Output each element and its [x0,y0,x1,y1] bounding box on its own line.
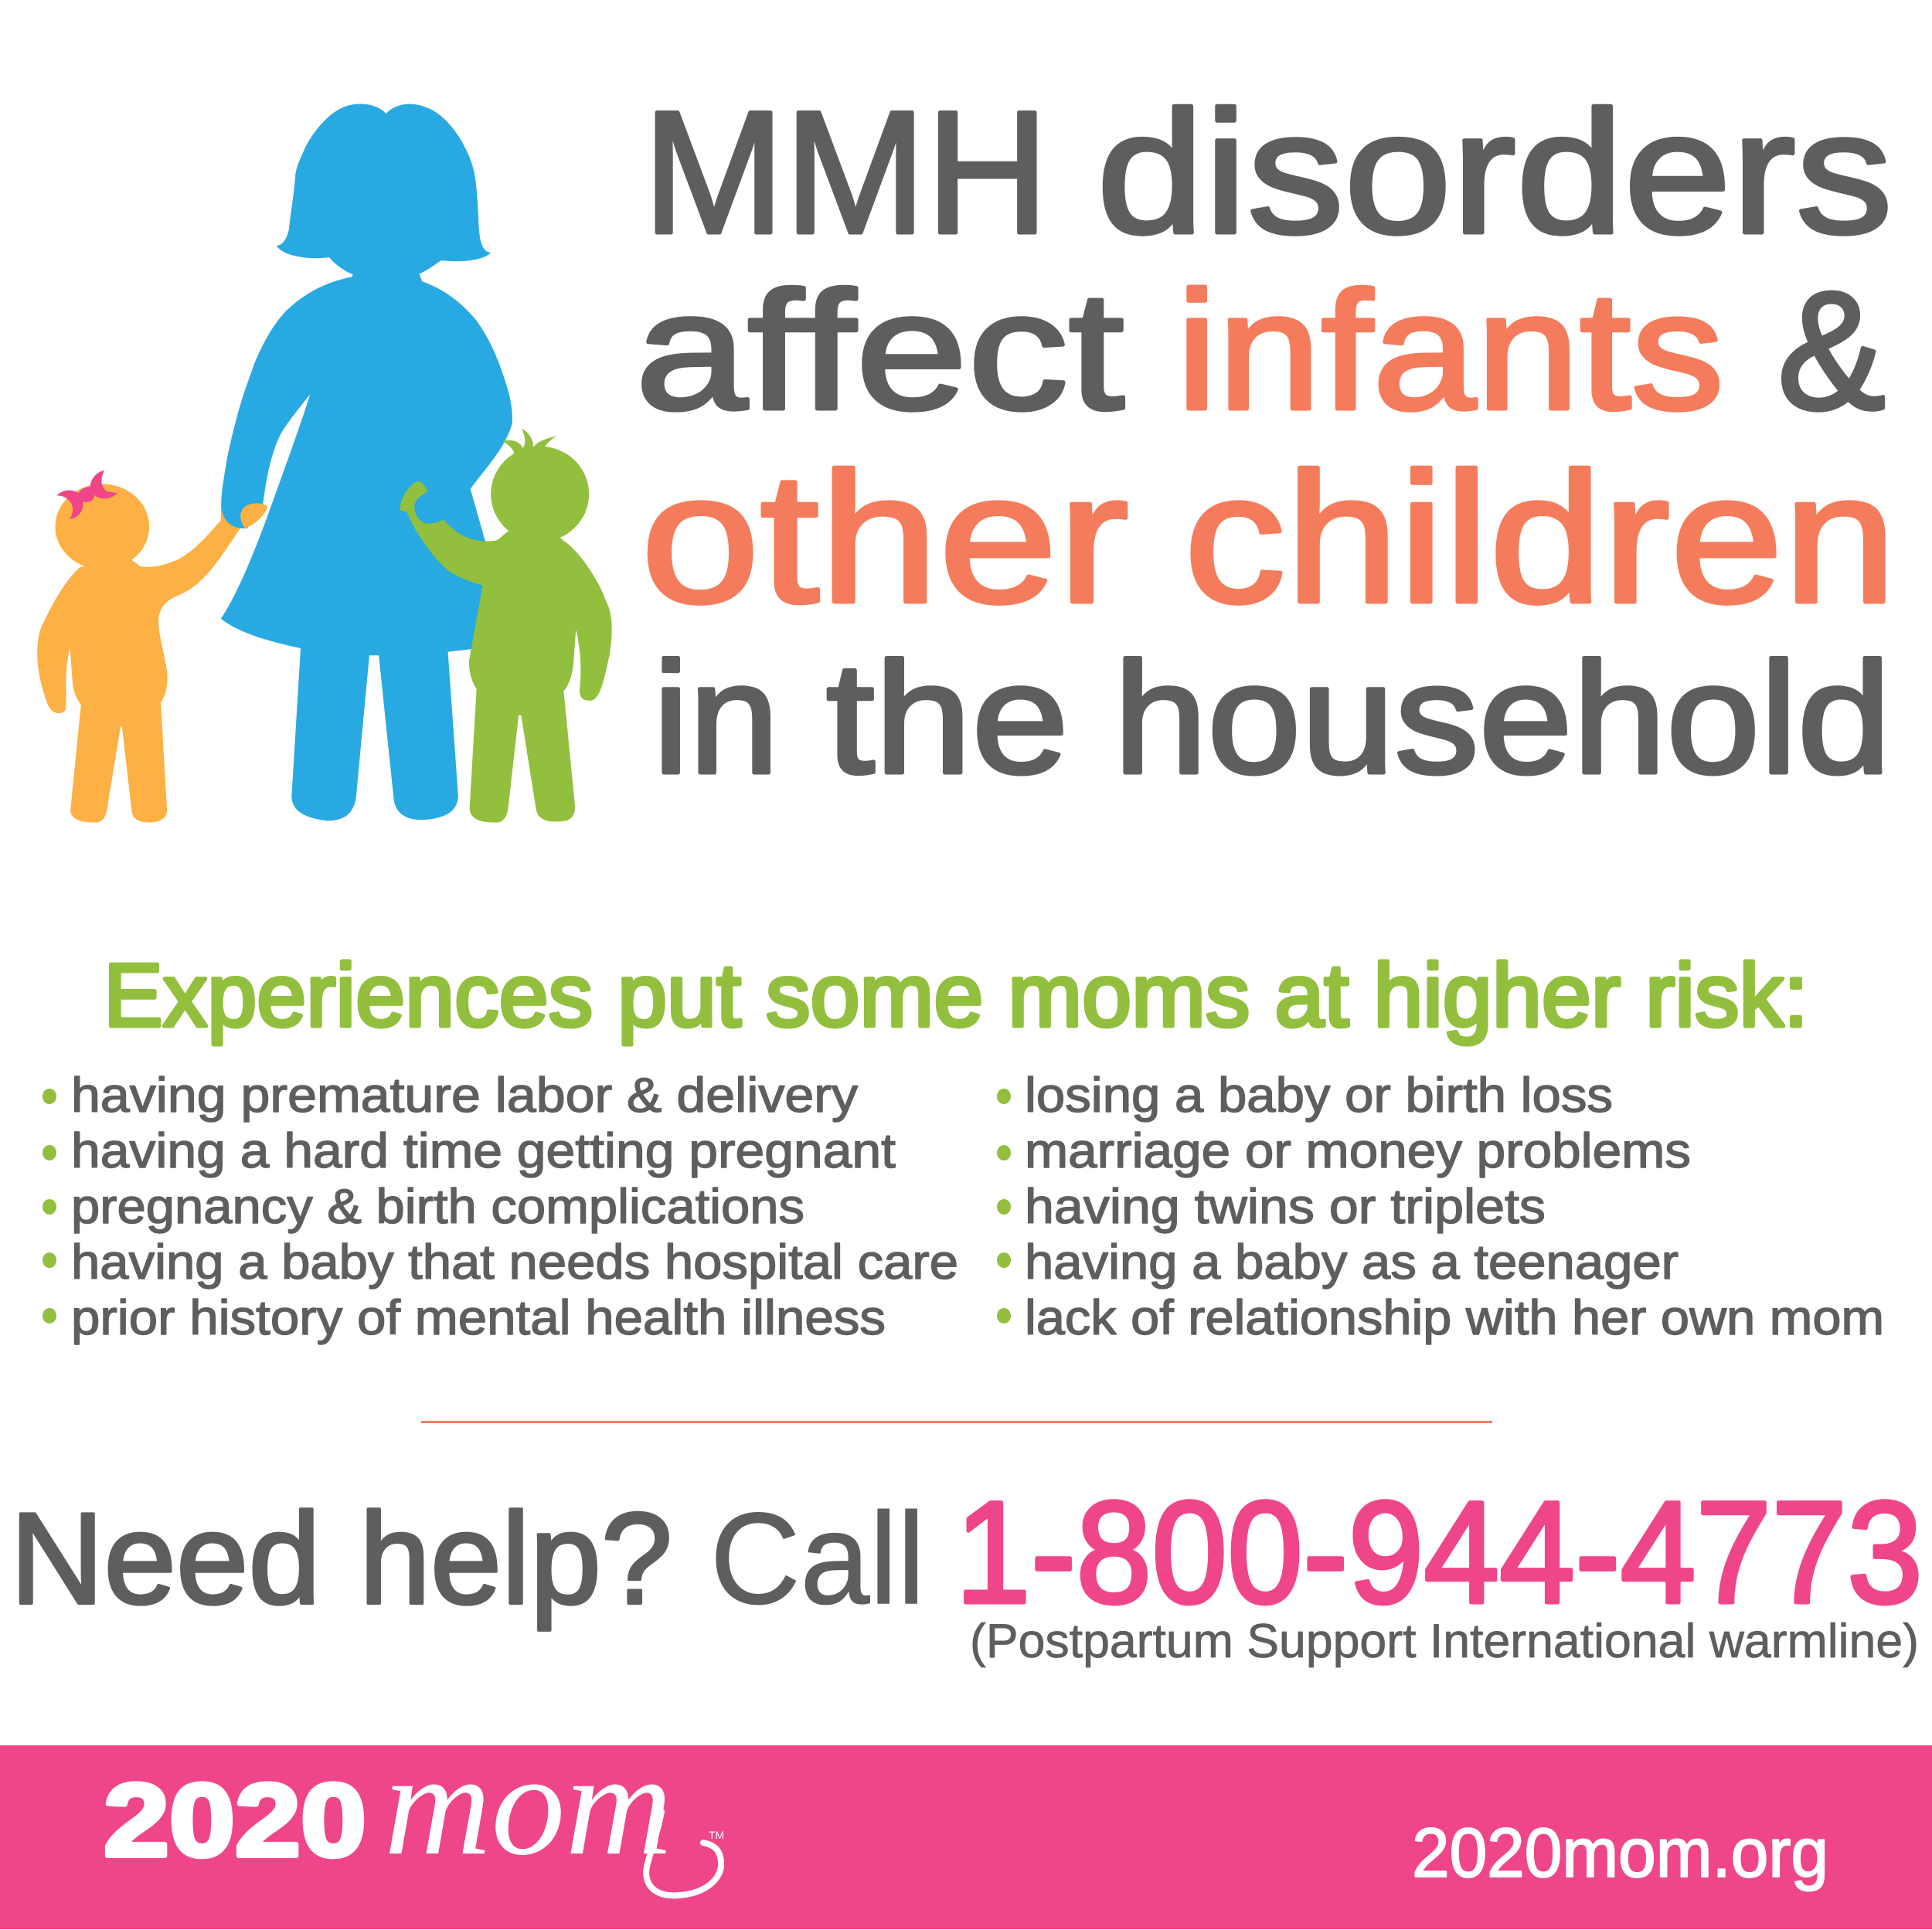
title line 1 [643,74,1893,270]
list item: losing a baby or birth loss [1025,1069,1613,1123]
website: 2020mom.org [1412,1815,1828,1892]
list item: having a baby that needs hospital care [71,1235,958,1289]
list item: having twins or triplets [1025,1180,1546,1234]
title line 3 [641,434,1896,641]
title line 4: the [826,630,1069,807]
icon: girl's hand over mother's hand [240,503,267,528]
title line 4: in [653,630,779,807]
title line 3: other [641,434,1129,641]
list item: having a hard time getting pregnant [71,1124,896,1178]
title line 1: MMH [643,74,1049,270]
call to action: need help: Need [10,1486,321,1631]
call to action: need help [10,1486,925,1631]
title line 2: affect [635,257,1124,445]
logo: 2020 Mom: mom [384,1724,672,1886]
list: risk factors right column [997,1069,1884,1345]
logo: 2020 Mom: TM [709,1829,724,1841]
logo: 2020 Mom: 2020 [104,1763,366,1878]
title line 1: disorders [1097,74,1893,270]
title line 4: household [1114,630,1891,807]
title: MMH disorders affect infants and other children in the household [635,74,1896,807]
caption: warmline: (Postpartum Support International warmline) [970,1615,1919,1668]
title line 2: infants [1176,257,1724,445]
illustration: mother holding hands with two children [37,104,612,822]
list item: prior history of mental health illness [71,1291,886,1345]
figure: girl in orange [37,484,241,822]
call to action: need help: help? [359,1486,672,1631]
figure: mother in blue dress [221,104,512,821]
figure: boy in green [400,429,612,822]
title line 4 [653,630,1891,807]
icon: pink hair bow [56,471,117,519]
call to action: need help: Call [710,1486,925,1631]
footer band [0,1724,1932,1929]
title line 2 [635,257,1886,445]
title line 2: & [1777,257,1886,445]
list item: marriage or money problems [1025,1124,1691,1178]
list item: lack of relationship with her own mom [1025,1291,1884,1345]
list: risk factors left column [43,1069,958,1345]
list item: having a baby as a teenager [1025,1235,1679,1289]
logo: 2020 Mom [104,1724,724,1895]
list item: pregnancy & birth complications [71,1180,804,1234]
heading: risk experiences: Experiences put some moms at higher risk: [104,945,1808,1045]
title line 3: children [1184,434,1896,641]
list item: having premature labor & delivery [71,1069,859,1123]
